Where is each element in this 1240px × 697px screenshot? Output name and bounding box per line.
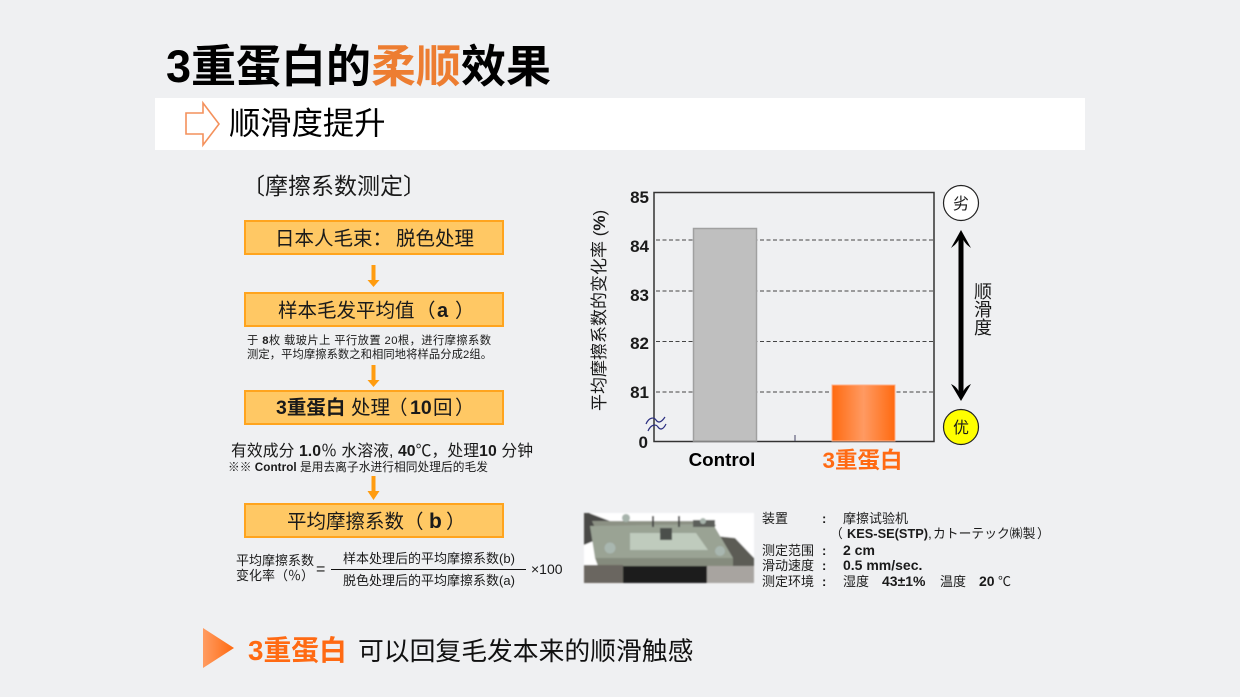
flow heading: 〔摩擦系数测定〕 — [242, 173, 426, 199]
icon: outline arrow — [186, 103, 219, 145]
badge: better — [944, 410, 978, 444]
step box: average a: 样本毛发平均值 — [278, 300, 415, 322]
arrow — [368, 265, 380, 287]
y-axis labels: 85 — [630, 188, 649, 207]
icon: triangle — [203, 628, 234, 668]
double arrow — [951, 230, 971, 401]
step box: average b — [245, 504, 503, 537]
formula: 样本处理后的平均摩擦系数(b) — [343, 551, 515, 566]
equipment specs: カトーテック㈱製 — [933, 526, 1036, 541]
badge: better: 优 — [953, 419, 969, 437]
equipment specs: : — [822, 558, 826, 573]
equipment specs: ℃ — [998, 574, 1011, 589]
step box: average a: ） — [455, 300, 475, 322]
step box: treatment: 10 — [410, 397, 432, 419]
plot frame — [654, 192, 934, 442]
vertical label: 滑 — [974, 300, 992, 320]
badge: worse — [944, 186, 978, 220]
equipment specs: 温度 — [940, 574, 966, 589]
equipment specs: ） — [1037, 526, 1050, 541]
equipment specs: 湿度 — [843, 574, 869, 589]
equipment specs: 20 — [979, 573, 995, 589]
step box: average b: b — [429, 510, 442, 533]
equipment specs: 装置 — [762, 511, 788, 526]
note: sample preparation: 测定，平均摩擦系数之和相同地将样品分成2组。 — [247, 347, 492, 361]
bar: Control — [694, 228, 756, 441]
formula: = — [316, 561, 325, 578]
y-axis labels: 84 — [630, 237, 650, 256]
equipment specs: 摩擦试验机 — [843, 511, 908, 526]
subtitle text: 顺滑度提升 — [229, 106, 386, 141]
note: sample preparation — [247, 333, 492, 361]
equipment specs: : — [822, 511, 826, 526]
y-axis labels: 82 — [630, 334, 649, 353]
equipment specs: , — [928, 526, 932, 541]
arrow — [368, 476, 380, 500]
conclusion — [203, 628, 693, 668]
step box: treatment: 回 — [433, 397, 453, 419]
y-axis labels — [630, 188, 650, 452]
step box: average b: （ — [404, 511, 424, 533]
step box: treatment: ） — [455, 397, 475, 419]
equipment specs: : — [822, 543, 826, 558]
formula: ×100 — [531, 561, 563, 577]
step box: average a: a — [437, 300, 449, 322]
equipment specs: 测定环境 — [762, 574, 814, 589]
arrow — [368, 365, 380, 387]
step box: treatment: （ — [388, 397, 408, 419]
x label: 3重蛋白: 3重蛋白 — [822, 448, 903, 473]
equipment specs: 测定范围 — [762, 543, 814, 558]
subtitle banner — [155, 98, 1085, 150]
formula: 平均摩擦系数 — [236, 553, 314, 568]
photo: friction tester — [584, 513, 754, 583]
equipment specs: 0.5 mm/sec. — [843, 557, 922, 573]
x label: Control: Control — [689, 449, 755, 470]
equipment specs: KES-SE(STP) — [847, 526, 928, 541]
step box: average b: ） — [446, 511, 466, 533]
step box: bleach: 日本人毛束： — [275, 228, 392, 250]
equipment specs: 43±1% — [882, 573, 926, 589]
conclusion text: 3重蛋白 — [248, 635, 347, 666]
step box: treatment — [245, 391, 503, 424]
equipment specs: : — [822, 574, 826, 589]
vertical label: 顺 — [974, 282, 992, 302]
step box: bleach: 脱色处理 — [396, 228, 474, 250]
step box: bleach — [245, 221, 503, 254]
note: treatment conditions: 有效成分 1.0％ 水溶液, 40℃，处理10 分钟 — [231, 442, 533, 460]
conclusion: 可以回复毛发本来的顺滑触感 — [358, 637, 693, 666]
equipment specs: （ — [830, 526, 843, 541]
formula: 脱色处理后的平均摩擦系数(a) — [343, 573, 515, 588]
vertical label — [974, 282, 992, 338]
y-axis labels: 0 — [639, 433, 648, 452]
badge: worse: 劣 — [953, 195, 969, 213]
y-axis title: 平均摩擦系数的变化率 (%) — [590, 210, 609, 411]
equipment specs — [762, 511, 1050, 589]
flowchart — [228, 221, 533, 537]
y-axis labels: 83 — [630, 286, 649, 305]
step box: treatment: 处理 — [351, 397, 390, 419]
equipment specs: 2 cm — [843, 542, 875, 558]
vertical label: 度 — [974, 318, 992, 338]
note: control: ※※ Control 是用去离子水进行相同处理后的毛发 — [228, 460, 488, 474]
step box: average a — [245, 293, 503, 326]
smoothness scale — [944, 186, 992, 444]
formula: 变化率（％） — [236, 568, 314, 583]
bar: 3重蛋白 — [832, 385, 895, 441]
axis break — [646, 417, 666, 431]
note: sample preparation: 于 8枚 载玻片上 平行放置 20根，进行摩擦系数 — [247, 333, 491, 347]
formula — [236, 551, 563, 588]
equipment specs: 滑动速度 — [762, 558, 814, 573]
step box: treatment: 3重蛋白 — [276, 397, 345, 419]
bar chart — [590, 188, 934, 473]
step box: average b: 平均摩擦系数 — [287, 511, 404, 533]
y-axis labels: 81 — [630, 383, 649, 402]
step box: average a: （ — [416, 300, 436, 322]
title: 3重蛋白的柔顺效果 — [166, 41, 551, 92]
